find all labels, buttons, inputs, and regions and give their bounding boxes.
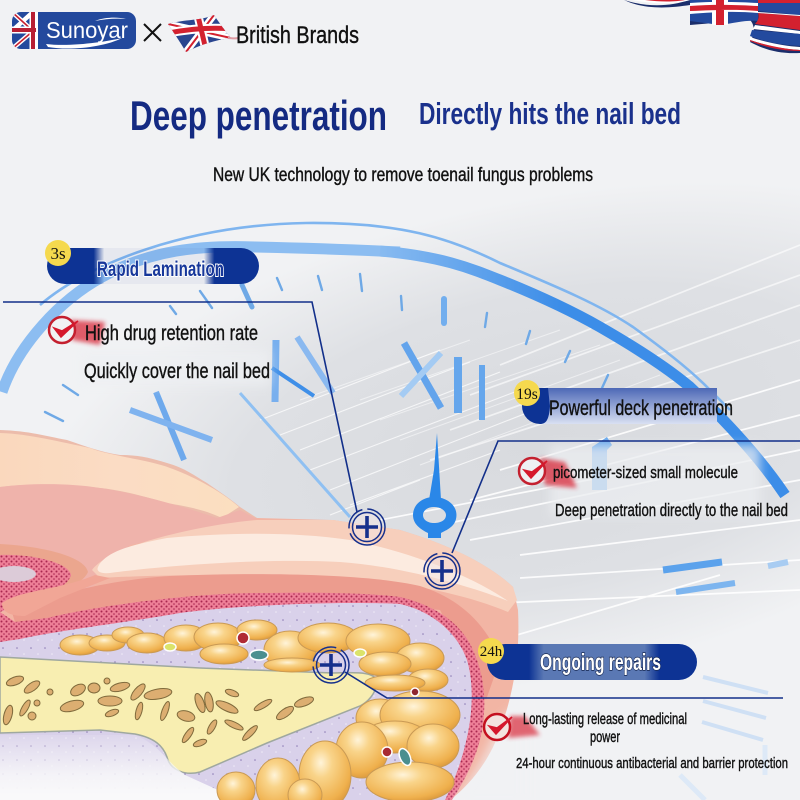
leader line [3,302,357,512]
matrix outer [0,544,88,608]
fat lobules upper band [60,620,448,691]
text smear [80,350,270,386]
benefit text: power [590,729,620,746]
pink skin under fold [0,484,257,612]
illustration: fingertip cross-section [0,430,525,800]
check icon [519,458,577,488]
dotted dermal layer [0,593,484,800]
text smear [550,445,760,515]
multiplication sign [144,24,161,41]
clock face [2,223,788,800]
bottom left fade [0,735,240,800]
benefit text: picometer-sized small molecule [553,463,738,482]
upper fold [0,430,257,522]
cuticle fold [2,575,110,616]
bone [0,657,377,773]
logo: Sunoyar: Sunoyar [46,17,128,43]
numeral XI [240,337,350,517]
lower right tick marks [663,562,788,800]
upper fold highlight [0,433,239,518]
logo flag [12,12,38,49]
pill label: Rapid Lamination [97,258,224,281]
clock outer arc [40,223,730,410]
marker: nail bed [313,647,349,683]
numeral XII [401,343,482,420]
matrix pale spot [0,566,36,582]
leader line [345,672,783,698]
pill header [47,248,259,284]
pill header [540,388,717,424]
benefit text: Long-lasting release of medicinal [523,711,687,728]
pill header [487,644,697,680]
benefit text: Quickly cover the nail bed [84,360,270,383]
pill label: Powerful deck penetration [549,397,733,420]
fingertip base skin [0,487,518,800]
check icon [484,714,540,740]
panel: 24h ongoing repairs [345,638,788,772]
pill label: Ongoing repairs [540,649,661,675]
clock hand [413,433,456,538]
benefit text: High drug retention rate [85,322,258,345]
bone marrow cavities [2,674,315,748]
fat lobules lower cluster [217,691,460,800]
clock main arc [2,247,400,392]
right skin fade [452,700,525,800]
panel: 3s rapid lamination [3,240,357,512]
salmon nail bed [10,574,500,700]
matrix dotted bump [0,555,71,612]
check icon [49,317,105,345]
badge 19s: 19s [516,386,538,403]
numeral X [130,392,212,460]
blood vessels [164,632,419,767]
nail band [92,520,517,612]
subtitle: Directly hits the nail bed [419,96,681,131]
icon: waving UK flag [168,15,238,52]
badge 3s: 3s [50,244,66,263]
logo: Sunoyar [12,12,136,49]
clock tick marks [45,274,608,421]
panel: 19s powerful deck penetration [452,380,800,553]
badge 24h: 24h [480,644,503,660]
title: Deep penetration [130,92,387,139]
badge 24h [478,638,504,664]
pill dark cap [522,388,550,424]
badge 3s [45,240,71,266]
top right flag ribbon [624,0,800,53]
tagline: New UK technology to remove toenail fungus problems [213,165,593,186]
brand label: British Brands [236,22,359,49]
clock main arc strong right part [380,251,785,495]
leader line [452,441,800,553]
purple tissue [0,603,472,800]
numeral I fragment [592,437,612,490]
nail plate [98,534,508,601]
marker: nail plate [424,553,460,589]
marker: nail surface [349,509,385,545]
badge 19s [514,380,540,406]
